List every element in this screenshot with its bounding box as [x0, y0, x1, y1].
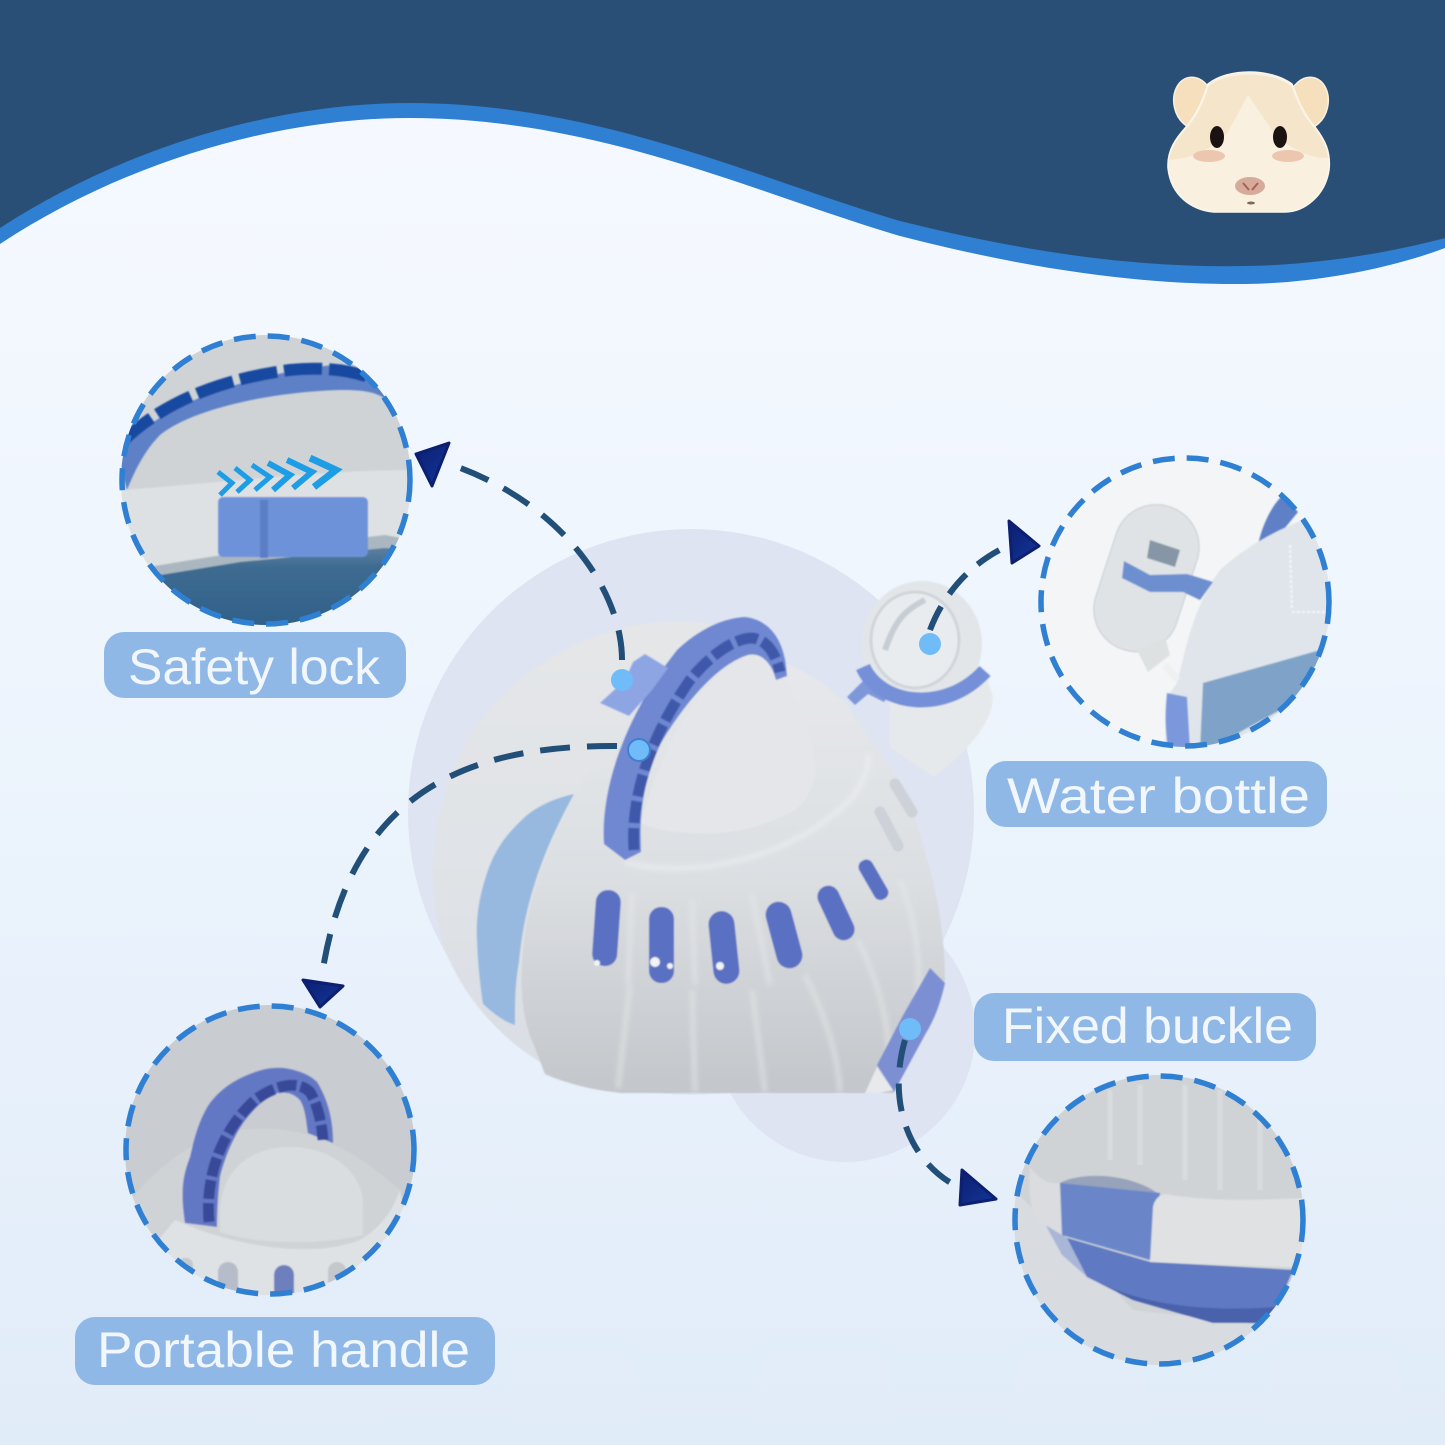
slots: [591, 857, 891, 985]
panel: water bottle detail: [1039, 456, 1340, 760]
safety lock tab: [600, 654, 668, 716]
label: fixed buckle: [974, 993, 1316, 1061]
label: fixed buckle: Fixed buckle: [1002, 998, 1293, 1054]
label: portable handle: [75, 1317, 495, 1385]
rim highlight: [625, 755, 868, 868]
label: water bottle: [986, 761, 1327, 827]
bottle connector: [847, 672, 892, 705]
carrier dome: [433, 621, 945, 1093]
bottle band: [863, 667, 985, 700]
backdrop circles behind product: [408, 529, 975, 1162]
lid: [641, 655, 815, 833]
ribs: [618, 880, 919, 1092]
marker dots: [611, 633, 941, 1040]
arrow: safety lock leader: [416, 443, 622, 660]
panel: safety lock detail: [118, 335, 412, 630]
icon: hamster face: [1168, 72, 1333, 212]
product: hamster carrier: [433, 581, 993, 1093]
label: water bottle: Water bottle: [1007, 768, 1310, 824]
bottle cap: [862, 581, 982, 707]
label: portable handle: Portable handle: [97, 1322, 470, 1378]
panel: fixed buckle detail: [1013, 1074, 1305, 1366]
header wave banner: [0, 0, 1445, 284]
buckle: [877, 968, 945, 1092]
handle: [604, 617, 787, 860]
label: safety lock: Safety lock: [128, 639, 381, 695]
arrow: portable handle leader: [303, 746, 617, 1007]
panel: portable handle detail: [124, 1004, 420, 1305]
bottle body: [890, 672, 993, 777]
chevrons: [218, 458, 336, 495]
label: safety lock: [104, 632, 406, 698]
water-blue interior: [477, 794, 574, 1025]
basket front: [522, 663, 945, 1093]
arrow: water bottle leader: [930, 521, 1039, 630]
arrow: fixed buckle leader: [899, 1040, 996, 1205]
